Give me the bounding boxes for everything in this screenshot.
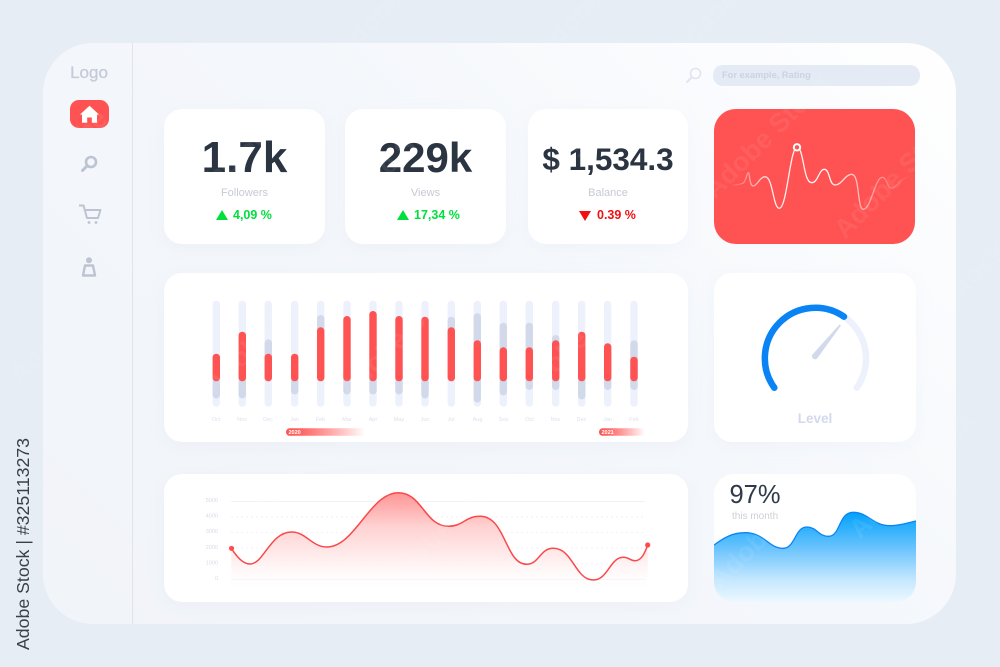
watermark overlay: Adobe Stock xyxy=(198,261,337,399)
watermark overlay: Adobe Stock xyxy=(173,456,312,594)
stock id side text: Adobe Stock | #325113273 xyxy=(13,438,33,650)
bar chart: Nov xyxy=(237,417,247,423)
bar chart: Oct xyxy=(525,417,534,423)
bar chart xyxy=(212,301,644,436)
panel: monthly percentage area chart xyxy=(714,474,916,602)
bar chart: Oct xyxy=(212,417,221,423)
area line chart: 1000 xyxy=(206,560,218,566)
bar chart: Jan xyxy=(603,417,612,423)
watermark overlay: Adobe Stock xyxy=(828,106,967,244)
watermark overlay: Adobe Stock xyxy=(513,266,652,404)
gauge label: Level xyxy=(798,411,832,426)
area line chart: 3000 xyxy=(206,529,218,535)
panel: area line chart xyxy=(164,474,688,602)
icon: top search xyxy=(686,68,702,83)
watermark overlay: Adobe Stock xyxy=(558,456,697,594)
sidebar divider xyxy=(132,43,133,624)
panel: followers xyxy=(164,109,325,244)
balance change: 0.39 % xyxy=(597,208,636,222)
area line chart: 5000 xyxy=(206,498,218,504)
area line chart xyxy=(206,492,650,582)
search bar: For example, Rating xyxy=(722,70,811,80)
bar chart: Apr xyxy=(369,417,377,423)
views label: Views xyxy=(411,187,440,199)
bar chart: 2021 xyxy=(602,430,614,436)
panel: monthly percentage area chart: this month xyxy=(732,511,778,522)
area line chart: 4000 xyxy=(206,514,218,520)
watermark overlay: Adobe Stock xyxy=(703,456,842,594)
bar chart: Feb xyxy=(316,417,325,423)
bar chart: Aug xyxy=(473,417,482,423)
panel: red pulse chart xyxy=(714,109,915,244)
watermark overlay: Adobe Stock xyxy=(48,376,187,514)
bar chart: Jul xyxy=(447,417,455,423)
watermark overlay: Adobe Stock xyxy=(843,406,982,544)
bar chart: Dec xyxy=(577,417,587,423)
panel: monthly percentage area chart: 97% xyxy=(730,481,781,509)
watermark overlay: Adobe Stock xyxy=(378,456,517,594)
watermark overlay: Adobe Stock xyxy=(333,266,472,404)
watermark overlay: Adobe Stock xyxy=(3,251,142,389)
area line chart: 2000 xyxy=(206,545,218,551)
panel: monthly bar chart xyxy=(164,273,688,442)
watermark overlay: Adobe Stock xyxy=(323,91,462,229)
panel: views xyxy=(345,109,506,244)
gauge dial xyxy=(762,304,870,391)
followers change: 4,09 % xyxy=(233,208,272,222)
panel: balance xyxy=(528,109,688,244)
bar chart: Jun xyxy=(421,417,429,423)
icon: home button xyxy=(70,100,109,128)
area line chart: 0 xyxy=(215,576,218,582)
sidebar logo text: Logo xyxy=(70,63,108,82)
balance label: Balance xyxy=(588,187,628,199)
bar chart: Mar xyxy=(342,417,352,423)
panel: level gauge xyxy=(714,273,916,442)
main dashboard panel xyxy=(43,43,956,624)
watermark overlay: Adobe Stock xyxy=(33,46,172,184)
balance change xyxy=(579,208,636,222)
followers change xyxy=(216,208,272,222)
bar chart: Nov xyxy=(551,417,561,423)
followers label: Followers xyxy=(221,187,268,199)
bar chart: Sep xyxy=(499,417,508,423)
balance value: $ 1,534.3 xyxy=(542,141,674,177)
followers value: 1.7k xyxy=(202,133,287,182)
bar chart: 2020 xyxy=(288,430,301,436)
search bar xyxy=(713,65,920,86)
icon: cart xyxy=(79,204,102,224)
icon: user xyxy=(82,257,96,277)
bar chart: Feb xyxy=(629,417,639,423)
bar chart: Jan xyxy=(290,417,299,423)
watermark overlay: Adobe Stock xyxy=(698,66,837,204)
views change: 17,34 % xyxy=(414,208,460,222)
bar chart: May xyxy=(394,417,404,423)
watermark overlay: Adobe Stock xyxy=(673,256,812,394)
bar chart: Dec xyxy=(263,417,273,423)
watermark overlay: Adobe Stock xyxy=(498,91,637,229)
watermark overlay: Adobe Stock xyxy=(163,91,302,229)
icon: sidebar search xyxy=(81,156,98,172)
views value: 229k xyxy=(379,134,472,181)
